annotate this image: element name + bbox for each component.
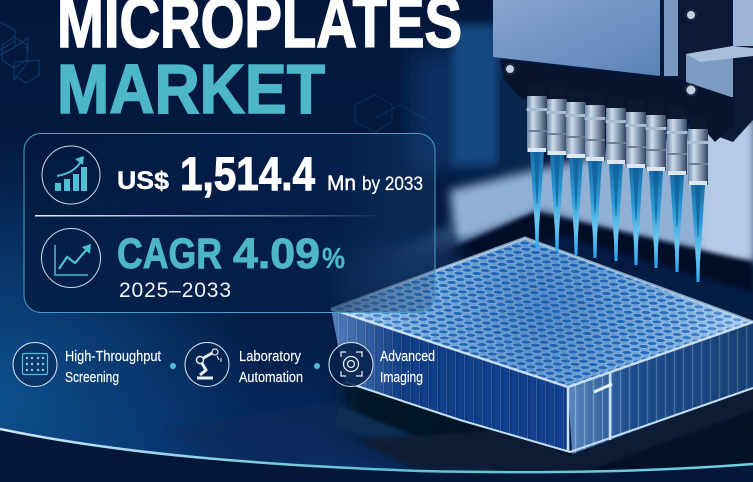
- feature: advanced imaging: Imaging: [380, 369, 423, 386]
- title: MARKET: [57, 50, 325, 128]
- forecast period: 2025–2033: [119, 279, 231, 302]
- feature: laboratory automation: Automation: [239, 369, 303, 386]
- title: [57, 0, 462, 128]
- market size value: [117, 147, 423, 200]
- feature: advanced imaging: [329, 342, 435, 386]
- feature: advanced imaging: Advanced: [380, 348, 435, 365]
- icon: line chart with arrow: [42, 228, 100, 288]
- feature: high-throughput screening: High-Throughput: [65, 348, 162, 365]
- panel: market stats: [24, 134, 435, 312]
- CAGR value: %: [322, 243, 345, 275]
- dispensing head: [493, 0, 753, 142]
- dark table and rollers: [160, 330, 753, 482]
- plate top with wells: [331, 238, 753, 387]
- feature: laboratory automation: Laboratory: [239, 348, 301, 365]
- microplate: [331, 238, 753, 454]
- market size value: US$: [117, 167, 169, 195]
- feature: high-throughput screening: [13, 342, 162, 386]
- CAGR value: 4.09: [233, 230, 320, 278]
- feature: laboratory automation: [185, 342, 303, 386]
- blurred lab scene background: [330, 25, 753, 310]
- plate left wall: [331, 309, 570, 452]
- bottom swoosh: [0, 429, 753, 482]
- pipette array: [526, 84, 708, 282]
- mounting screws: [505, 10, 696, 96]
- hexagon molecule decoration: [0, 22, 430, 132]
- market size value: 1,514.4: [180, 147, 315, 200]
- icon: bar chart with rising arrow: [42, 146, 100, 204]
- CAGR value: CAGR: [117, 230, 222, 278]
- market size value: by 2033: [362, 174, 423, 195]
- separator dot: [170, 363, 176, 369]
- plate right wall: [568, 322, 753, 454]
- CAGR value: [117, 230, 345, 278]
- feature: high-throughput screening: Screening: [65, 369, 119, 386]
- separator dot: [314, 363, 320, 369]
- market size value: Mn: [327, 172, 356, 195]
